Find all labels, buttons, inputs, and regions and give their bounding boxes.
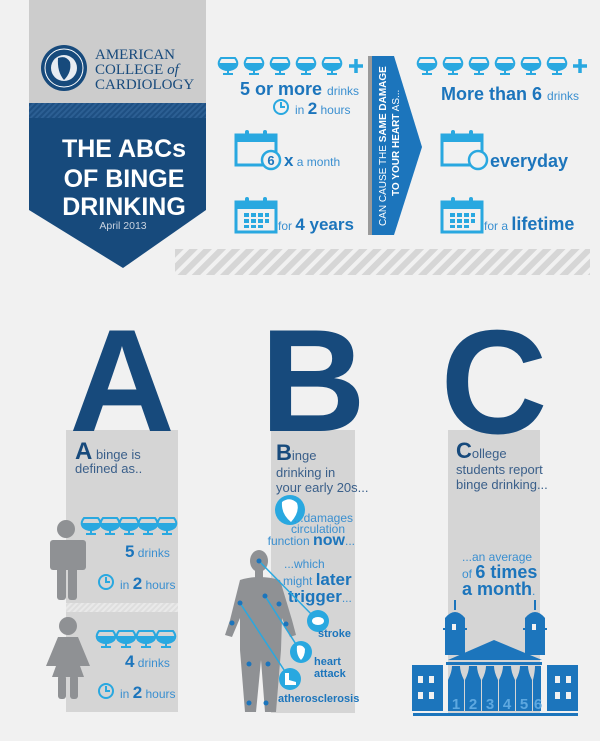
banner	[29, 0, 206, 268]
panel: B: might later	[283, 570, 352, 589]
panel: A: 5 drinks	[125, 542, 170, 561]
panel: left comparison: 6	[267, 153, 275, 168]
panel: right comparison: everyday	[490, 151, 568, 171]
logo text: AMERICAN	[95, 47, 175, 63]
panel: right comparison: More than 6 drinks	[441, 84, 579, 104]
arrow: same damage: TO YOUR HEART AS...	[391, 90, 402, 196]
panel: B: drinking in	[276, 465, 335, 480]
panel: B: atherosclerosis	[278, 693, 359, 705]
arrow: same damage	[368, 56, 422, 235]
icon: man	[50, 520, 86, 600]
title: DRINKING	[62, 193, 186, 221]
panel: C: 4	[503, 696, 512, 713]
panel: C	[412, 300, 578, 716]
panel: C: College	[456, 438, 507, 463]
title: THE ABCs	[62, 135, 186, 163]
icon: woman	[46, 617, 90, 699]
icon: 5 glasses	[219, 58, 363, 75]
panel: C: students report	[456, 462, 543, 477]
title	[62, 135, 186, 221]
icon: heart attack	[290, 641, 312, 663]
panel: left comparison: 5 or more drinks	[240, 79, 359, 99]
logo: ACC seal	[41, 45, 87, 91]
panel: right comparison	[418, 58, 587, 234]
panel: B: heart	[314, 656, 341, 668]
panel: B: Binge	[276, 440, 316, 465]
icon: foot	[279, 668, 301, 690]
panel: B	[225, 299, 368, 713]
panel: left comparison	[219, 58, 363, 234]
panel: B: ...damages	[294, 511, 353, 525]
panel: C: 3	[486, 696, 494, 713]
panel: B: ...which	[284, 557, 325, 571]
icon: stroke	[307, 610, 329, 632]
panel: left comparison: for 4 years	[278, 215, 354, 234]
panel: left comparison: x a month	[284, 151, 340, 170]
icon: heart	[275, 495, 305, 525]
panel: A: in 2 hours	[120, 683, 176, 702]
panel: B: stroke	[318, 628, 351, 640]
panel: C: 6	[534, 696, 542, 713]
panel: C: of 6 times	[462, 562, 537, 582]
title: OF BINGE	[64, 165, 184, 193]
panel: A: A binge is	[75, 438, 141, 465]
panel: C: 5	[520, 696, 528, 713]
panel: A: 4 drinks	[125, 652, 170, 671]
panel: C: 2	[469, 696, 477, 713]
panel: A: A	[69, 299, 175, 462]
panel: C: 1	[452, 696, 460, 713]
arrow: same damage: CAN CAUSE THE SAME DAMAGE	[378, 66, 389, 226]
panel: B: circulation	[291, 522, 345, 536]
panel: B: your early 20s...	[276, 480, 368, 495]
panel: C: C	[441, 300, 547, 465]
panel: A	[46, 299, 178, 712]
panel: C: binge drinking...	[456, 477, 548, 492]
panel: C: ...an average	[462, 550, 532, 564]
logo text: COLLEGE of	[95, 62, 181, 78]
panel: B: function now...	[268, 532, 355, 549]
panel: C: a month.	[462, 579, 535, 599]
panel: A: defined as..	[75, 461, 142, 476]
date: April 2013	[99, 220, 147, 232]
panel: right comparison: for a lifetime	[484, 214, 574, 234]
panel: B: attack	[314, 668, 347, 680]
body figure	[225, 550, 296, 712]
logo text: CARDIOLOGY	[95, 77, 194, 93]
logo text	[95, 47, 194, 93]
panel: B: trigger...	[288, 587, 352, 606]
panel: A: in 2 hours	[120, 574, 176, 593]
panel: left comparison: in 2 hours	[295, 99, 351, 118]
icon: college building	[412, 600, 578, 716]
panel: B: B	[260, 299, 366, 462]
